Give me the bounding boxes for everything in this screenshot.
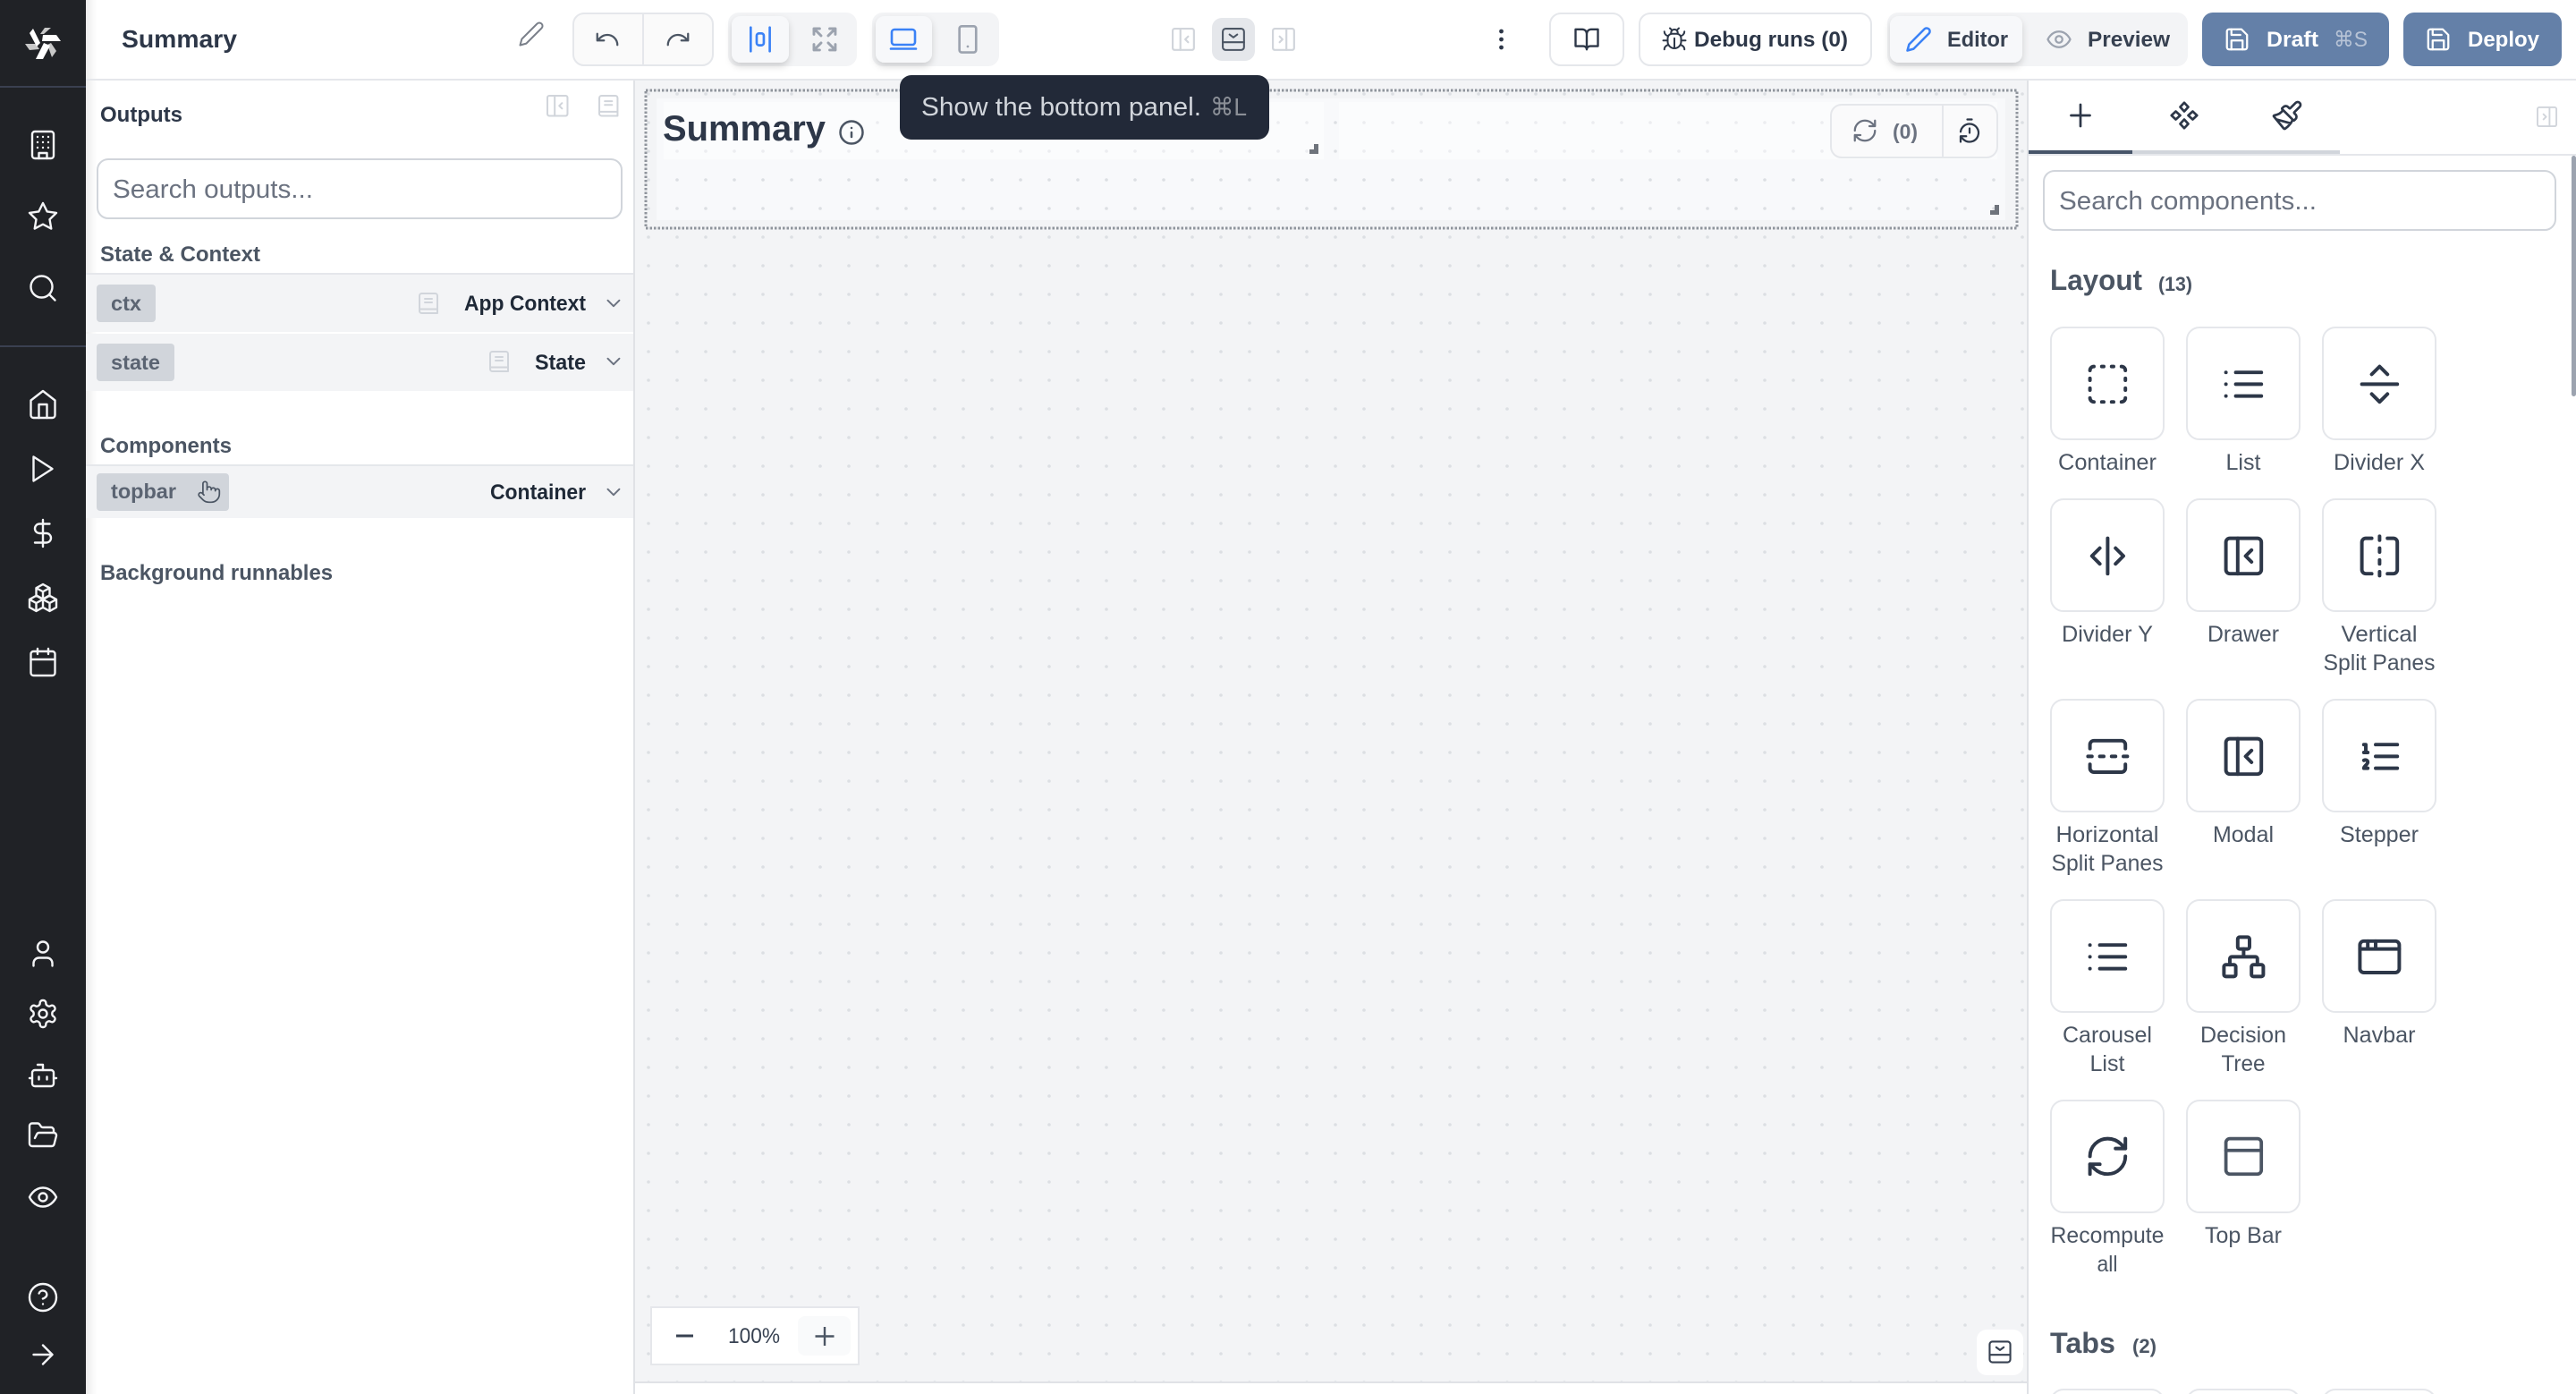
editor / preview toggle: [1887, 13, 2188, 66]
editor / preview toggle: Preview: [2088, 28, 2170, 52]
icon: bot: [30, 1065, 56, 1086]
bottom panel toggle button: [1977, 1330, 2023, 1375]
row: state: [86, 334, 633, 391]
icon: help: [30, 1284, 56, 1311]
icon: collapse right panel: [2538, 107, 2556, 126]
icon: laptop: [891, 30, 916, 48]
icon: collapse panel: [547, 96, 567, 115]
recompute button group: (0): [1893, 120, 1918, 143]
card: top bar: [2187, 1101, 2300, 1248]
card: vertical split panes: [2323, 499, 2436, 676]
page name: Summary: Summary: [122, 25, 237, 53]
card: carousel list: Carousel: [2063, 1023, 2152, 1048]
card: decision tree: Decision: [2200, 1023, 2286, 1048]
app frame: dotted selection outline: [646, 90, 2017, 228]
debug runs button: [1640, 13, 1871, 65]
card: divider y: [2051, 499, 2164, 647]
recompute button group: [1831, 105, 1997, 157]
card: container: [2051, 327, 2164, 475]
next row of cards, cut off: [2051, 1390, 2436, 1394]
deploy button: Deploy: [2468, 28, 2540, 52]
icon: more menu: [1499, 30, 1504, 49]
icon: preview eye: [2048, 31, 2070, 47]
device toggle group: [872, 13, 999, 66]
icon: centered width: [750, 28, 770, 51]
icon: calendar: [30, 649, 55, 676]
card: top bar: Top Bar: [2205, 1223, 2282, 1248]
tooltip: show the bottom panel: Show the bottom panel.: [921, 93, 1201, 122]
card: modal: [2187, 700, 2300, 847]
icon: boxes: [30, 584, 56, 611]
card: drawer: [2187, 499, 2300, 647]
card: list: [2187, 327, 2300, 475]
search outputs input: Search outputs...: [113, 175, 313, 204]
row: ctx: ctx: [111, 292, 141, 315]
icon: editor pencil: [1907, 28, 1930, 50]
card: drawer: Drawer: [2207, 622, 2279, 647]
panel: outputs: [86, 81, 635, 1394]
tooltip: show the bottom panel: [900, 75, 1269, 140]
icon: undo: [597, 34, 617, 45]
card: horizontal split panes: [2051, 700, 2164, 876]
icon: full width: [814, 29, 835, 50]
zoom control: [651, 1307, 859, 1364]
card: stepper: [2323, 700, 2436, 847]
zoom control: 100%: [728, 1324, 780, 1348]
row: topbar: topbar: [111, 480, 176, 503]
card: list: List: [2225, 450, 2261, 475]
heading: layout (13): (13): [2158, 273, 2192, 295]
tooltip: show the bottom panel: ⌘L: [1210, 93, 1247, 121]
card: modal: Modal: [2213, 822, 2274, 847]
icon: user: [34, 941, 52, 966]
card: decision tree: Tree: [2222, 1051, 2265, 1076]
card: carousel list: List: [2089, 1051, 2125, 1076]
icon: logo: [25, 28, 61, 59]
icon: refresh: [1855, 121, 1875, 140]
row: state: state: [111, 351, 160, 374]
search outputs input: [97, 159, 622, 218]
width toggle group: [728, 13, 857, 66]
icon: timer reset: [1961, 120, 1979, 141]
card: horizontal split panes: Horizontal: [2055, 822, 2159, 847]
debug runs button: Debug runs (0): [1694, 28, 1848, 52]
icon: workspace building: [32, 132, 54, 158]
card: recompute all: [2050, 1101, 2165, 1277]
card: horizontal split panes: Split Panes: [2052, 851, 2163, 876]
row: topbar: [86, 464, 633, 518]
icon: hand cursor: [199, 481, 219, 502]
card: carousel list: [2051, 900, 2164, 1076]
card: navbar: Navbar: [2343, 1023, 2415, 1048]
icon: play: [34, 456, 52, 481]
card: divider y: Divider Y: [2062, 622, 2153, 647]
tabs strip: [2029, 102, 2576, 156]
row: topbar: Container: [490, 480, 586, 505]
card: stepper: Stepper: [2340, 822, 2419, 847]
undo / redo group: [573, 13, 713, 65]
heading: background runnables: Background runnables: [100, 561, 333, 585]
icon: home: [30, 391, 55, 418]
row: ctx: [86, 273, 633, 332]
draft button: ⌘S: [2334, 28, 2368, 52]
card: vertical split panes: Split Panes: [2324, 650, 2435, 676]
canvas area: [635, 81, 2027, 1394]
heading: layout (13): [2050, 264, 2192, 296]
heading: outputs: Outputs: [100, 103, 182, 127]
icon: star: [30, 203, 56, 229]
icon: dollar: [35, 520, 51, 547]
heading: tabs (2): [2050, 1327, 2157, 1359]
card: container: Container: [2058, 450, 2157, 475]
icon: phone: [960, 26, 976, 53]
card: navbar: [2323, 900, 2436, 1048]
icon: right panel toggle: [1273, 29, 1294, 50]
deploy button: [2403, 13, 2562, 66]
icon: settings: [30, 1000, 55, 1027]
icon: docs book: [599, 96, 617, 115]
heading: tabs (2): (2): [2132, 1335, 2157, 1357]
icon: eye: [30, 1188, 56, 1206]
card: recompute all: all: [2097, 1252, 2118, 1277]
icon: rename pencil: [521, 22, 543, 45]
top bar: [86, 0, 2576, 81]
resize handles: [1309, 144, 1999, 215]
card: divider x: [2323, 327, 2436, 475]
canvas heading: Summary: Summary: [663, 109, 826, 149]
card: recompute all: Recompute: [2050, 1223, 2165, 1248]
icon: search: [30, 276, 55, 301]
heading: tabs (2): Tabs: [2050, 1327, 2115, 1359]
panel visibility toggles: [1173, 18, 1294, 61]
panel: component library: [2027, 81, 2576, 1394]
editor / preview toggle: Editor: [1947, 28, 2008, 52]
icon: redo: [668, 34, 688, 45]
page name: Summary: [86, 0, 543, 79]
heading: components: Components: [100, 434, 232, 458]
icon: left panel toggle: [1173, 29, 1194, 50]
icon: expand arrow: [34, 1346, 52, 1364]
card: divider x: Divider X: [2334, 450, 2425, 475]
icon: folder: [30, 1124, 56, 1146]
scrollbar: [2572, 156, 2576, 396]
heading: state and context: State & Context: [100, 242, 260, 267]
left sidebar: [0, 0, 86, 1394]
draft button: [2202, 13, 2389, 66]
row: ctx: App Context: [464, 292, 586, 316]
docs button: [1550, 13, 1623, 65]
card: decision tree: [2187, 900, 2300, 1076]
heading: layout (13): Layout: [2050, 264, 2142, 296]
search components input: Search components...: [2059, 187, 2317, 216]
search components input: [2044, 171, 2555, 230]
row: state: State: [535, 351, 586, 375]
icon: bottom panel toggle active: [1212, 18, 1255, 61]
draft button: Draft: [2267, 28, 2318, 52]
card: vertical split panes: Vertical: [2342, 622, 2417, 647]
icon: info: [841, 122, 862, 143]
